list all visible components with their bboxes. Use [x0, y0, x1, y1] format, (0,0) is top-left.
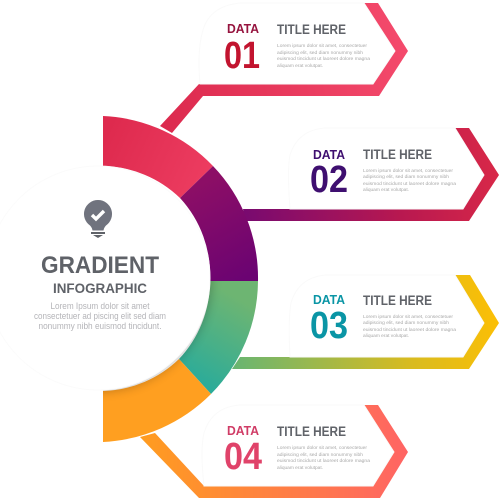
title: TITLE HERE: TITLE HERE [363, 147, 432, 162]
body text: adipiscing elit, sed diam nonummy nibh [363, 174, 449, 179]
body text: Lorem ipsum dolor sit amet, consectetuer [363, 168, 453, 173]
body text [363, 168, 456, 192]
body text: aliquam erat volutpat. [363, 187, 409, 192]
body text: aliquam erat volutpat. [363, 333, 409, 338]
connector arrow 04 [140, 405, 408, 498]
body text: aliquam erat volutpat. [277, 63, 323, 68]
title: TITLE HERE: TITLE HERE [363, 293, 432, 308]
body text: euismod tincidunt ut laoreet dolore magna [363, 181, 456, 186]
label: DATA 02: DATA [313, 148, 345, 162]
ring segment: green [179, 281, 258, 394]
body text: adipiscing elit, sed diam nonummy nibh [363, 320, 449, 325]
title: TITLE HERE: TITLE HERE [277, 424, 346, 439]
body text: Lorem ipsum dolor sit amet, consectetuer [277, 445, 367, 450]
number: 02: 02 [310, 159, 348, 201]
number: 01: 01 [224, 35, 260, 77]
description text: nonummy nibh euismod tincidunt. [38, 320, 162, 331]
body text [277, 445, 370, 470]
body text [363, 314, 456, 338]
connector arrow 02 [243, 128, 499, 221]
label: DATA 04: DATA [227, 424, 259, 438]
description text: consectetuer ad piscing elit sed diam [34, 310, 166, 321]
body text: euismod tincidunt ut laoreet dolore magna [277, 458, 370, 463]
body text: adipiscing elit, sed diam nonummy nibh [277, 452, 363, 457]
body text: euismod tincidunt ut laoreet dolore magna [363, 327, 456, 332]
subheading: INFOGRAPHIC: INFOGRAPHIC [53, 281, 147, 296]
ring segment: red [103, 116, 213, 198]
icon: light bulb with check [84, 200, 112, 238]
gradient ring [103, 116, 258, 442]
panel: data 03 [289, 275, 484, 357]
label: DATA 01: DATA [227, 22, 259, 36]
number: 04: 04 [224, 436, 262, 478]
description text [34, 300, 166, 331]
ring segment: purple [180, 166, 258, 281]
panel: data 04 [202, 405, 394, 486]
label: DATA 03: DATA [313, 293, 345, 307]
heading: GRADIENT: GRADIENT [41, 252, 159, 279]
body text [277, 43, 370, 68]
panel: data 01 [199, 3, 395, 84]
panel: data 02 [288, 128, 484, 209]
ring segment: orange [103, 359, 211, 442]
body text: adipiscing elit, sed diam nonummy nibh [277, 50, 363, 55]
body text: Lorem ipsum dolor sit amet, consectetuer [363, 314, 453, 319]
body text: Lorem ipsum dolor sit amet, consectetuer [277, 43, 367, 48]
connector arrow 03 [232, 275, 499, 369]
body text: aliquam erat volutpat. [277, 465, 323, 470]
title: TITLE HERE: TITLE HERE [277, 22, 346, 37]
description text: Lorem Ipsum dolor sit amet [50, 300, 150, 311]
number: 03: 03 [310, 305, 348, 347]
body text: euismod tincidunt ut laoreet dolore magna [277, 56, 370, 61]
center circle [0, 166, 210, 390]
connector arrow 01 [160, 3, 408, 133]
